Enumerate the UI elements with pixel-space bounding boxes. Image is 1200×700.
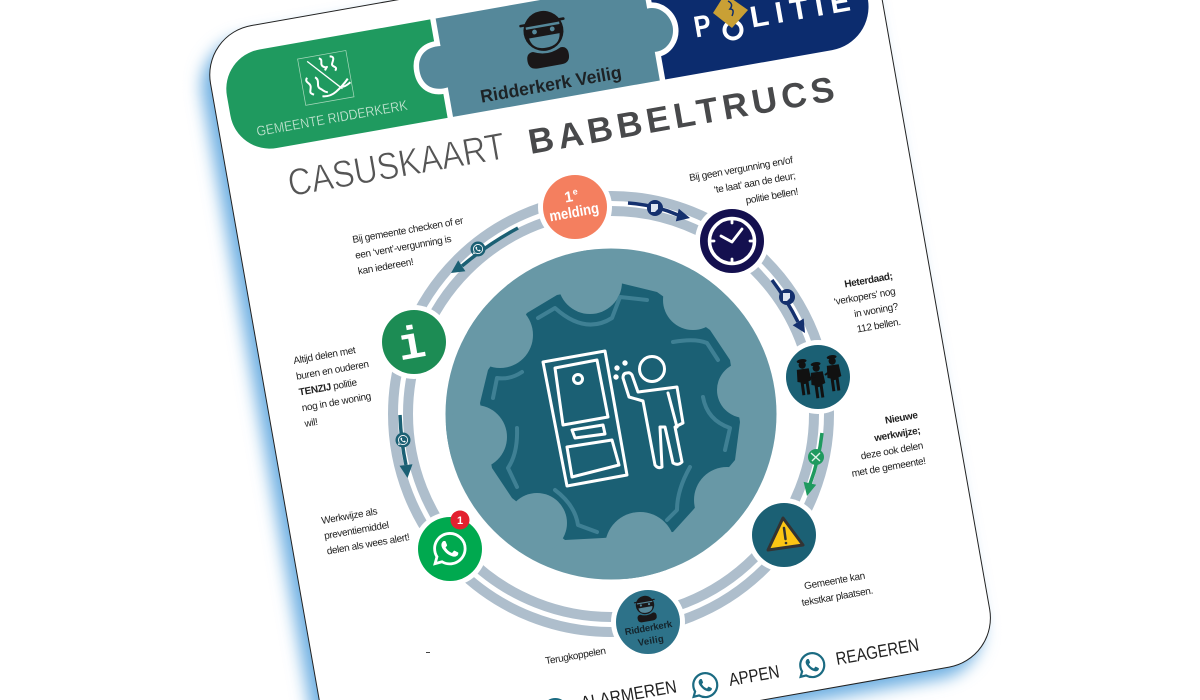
text: altijd delen: buren en ouderen xyxy=(295,359,370,383)
text: heterdaad: Heterdaad; xyxy=(844,271,894,290)
icon: door xyxy=(543,351,627,486)
text: altijd delen: TENZIJ politie xyxy=(298,377,358,398)
arrow: police to warning xyxy=(804,433,824,496)
footer: alarmeren xyxy=(542,676,678,700)
header panel: gemeente ridderkerk xyxy=(220,18,456,155)
title light part: CASUSKAART xyxy=(285,126,509,205)
text: nieuwe werkwijze: deze ook delen xyxy=(860,441,924,462)
text: heterdaad: in woning? xyxy=(853,302,900,320)
node: 1e melding: 1 xyxy=(563,188,574,206)
node: ridderkerk veilig: Veilig xyxy=(637,634,665,649)
text: gemeente checken: kan iedereen! xyxy=(357,257,414,277)
text: terugkoppelen: Terugkoppelen xyxy=(545,646,607,667)
text: altijd delen: nog in de woning xyxy=(301,391,372,414)
text: tekstkar: Gemeente kan xyxy=(803,571,866,592)
node: whatsapp xyxy=(413,510,487,586)
text: heterdaad: ‘verkopers’ nog xyxy=(833,286,896,308)
text: werkwijze preventie: Werkwijze als xyxy=(321,506,378,527)
politie wordmark xyxy=(691,0,853,44)
text: gemeente checken: Bij gemeente checken of er xyxy=(352,215,465,246)
node: warning xyxy=(747,498,821,572)
header panel: ridderkerk veilig xyxy=(411,0,681,121)
gear shape xyxy=(480,283,740,540)
ridderkerk veilig label: Ridderkerk Veilig xyxy=(479,62,623,107)
node: 1e melding: e xyxy=(572,186,578,197)
central disc xyxy=(443,248,776,582)
text: nieuwe werkwijze: werkwijze; xyxy=(872,425,921,444)
arrow: gemeente checken xyxy=(451,228,518,273)
node: clock xyxy=(695,204,769,278)
node: police xyxy=(781,340,855,414)
small mark xyxy=(426,652,430,654)
text: altijd delen xyxy=(292,343,378,430)
node: ridderkerk veilig xyxy=(611,585,685,659)
gear inner accents xyxy=(493,297,730,532)
gemeente name: GEMEENTE RIDDERKERK xyxy=(255,97,409,139)
text: tekstkar: tekstkar plaatsen. xyxy=(801,586,874,609)
politie wordmark: P xyxy=(691,9,714,44)
text: gemeente checken: een ‘vent’-vergunning is xyxy=(354,234,452,262)
arrow: melding to clock xyxy=(628,200,690,221)
text: werkwijze preventie: preventiemiddel xyxy=(323,520,390,542)
footer: appen: APPEN xyxy=(727,661,781,690)
header panel: politie xyxy=(626,0,875,83)
text: werkwijze preventie xyxy=(321,502,410,557)
footer: appen xyxy=(692,661,781,698)
text: tekstkar xyxy=(798,570,874,609)
arrow: preventie xyxy=(396,415,412,478)
icon: gemeente emblem xyxy=(298,51,354,105)
ring track xyxy=(393,196,829,632)
card drop shadow xyxy=(194,0,990,700)
text: gemeente checken xyxy=(352,215,470,277)
gear scallops xyxy=(443,250,773,582)
node: info: i xyxy=(394,318,430,374)
text: nieuwe werkwijze xyxy=(843,410,927,480)
text: heterdaad: 112 bellen. xyxy=(856,317,902,335)
title xyxy=(285,68,837,205)
icon: burglar xyxy=(517,7,572,70)
icon: person knocking xyxy=(615,356,683,468)
text: nieuwe werkwijze: met de gemeente! xyxy=(851,456,927,480)
text: geen vergunning xyxy=(689,155,800,216)
footer: reageren: REAGEREN xyxy=(834,635,920,669)
arrow: clock to police xyxy=(772,280,805,333)
node: info xyxy=(377,305,451,379)
text: geen vergunning: Bij geen vergunning en/of xyxy=(689,155,794,184)
card xyxy=(202,0,998,700)
icon: politie badge xyxy=(713,0,748,38)
text: geen vergunning: politie bellen! xyxy=(745,187,799,207)
title bold part: BABBELTRUCS xyxy=(525,70,837,162)
node: 1e melding: melding xyxy=(548,200,600,225)
text: altijd delen: Altijd delen met xyxy=(293,345,357,367)
footer: reageren xyxy=(799,635,920,678)
text: geen vergunning: ‘te laat’ aan de deur; xyxy=(713,171,796,196)
node: ridderkerk veilig: Ridderkerk xyxy=(624,619,674,638)
node: 1e melding xyxy=(538,170,612,244)
text: werkwijze preventie: delen als wees alert! xyxy=(326,532,410,557)
notification badge: 1 xyxy=(457,515,463,527)
text: altijd delen: wil! xyxy=(303,417,318,430)
text: heterdaad xyxy=(830,271,902,339)
text: nieuwe werkwijze: Nieuwe xyxy=(884,410,919,427)
